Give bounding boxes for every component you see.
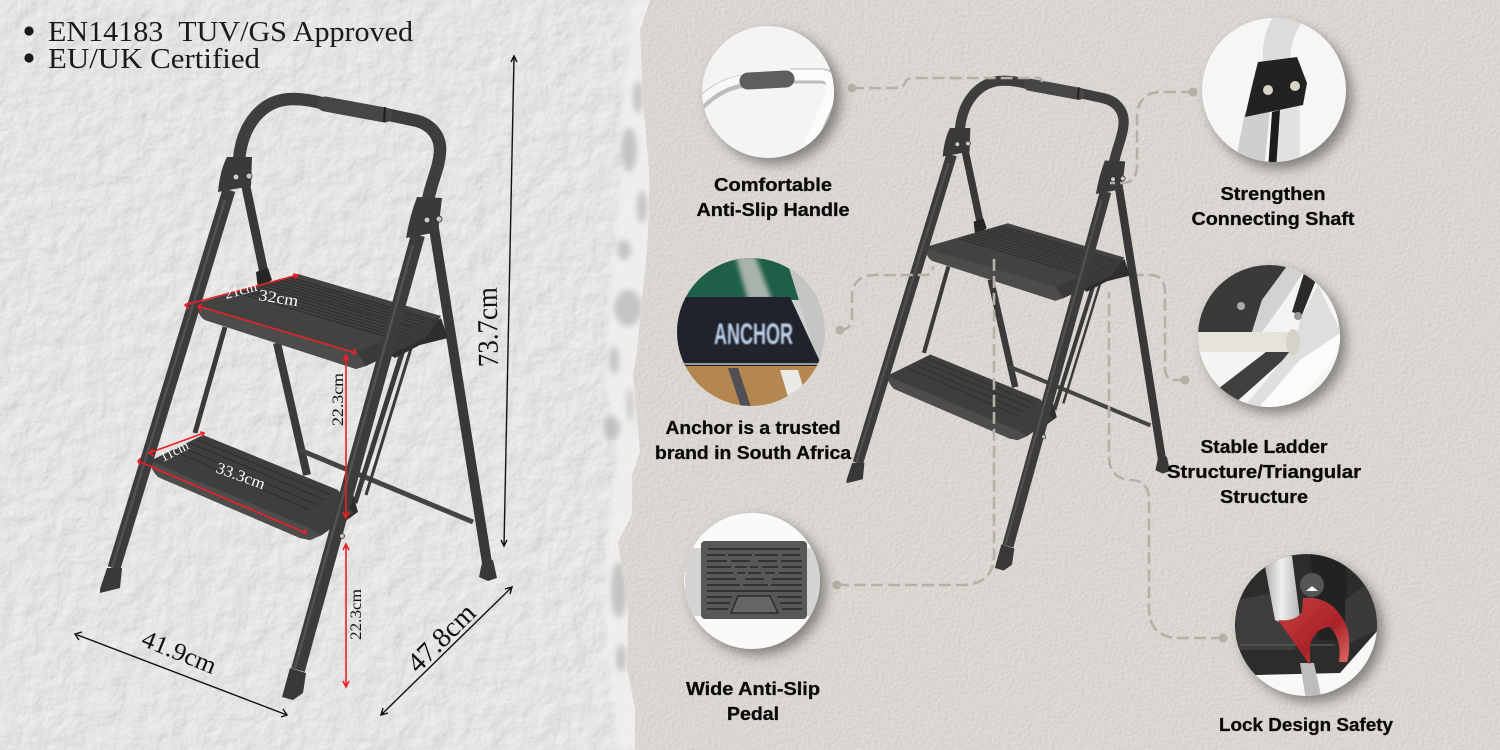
caption: shaft xyxy=(1192,184,1354,229)
caption: brand: brand in South Africa xyxy=(655,443,852,463)
caption: pedal: Wide Anti-Slip xyxy=(686,679,820,699)
caption: handle: Comfortable xyxy=(714,175,832,195)
photo circle: stable structure xyxy=(1195,262,1346,413)
photo circle: anchor brand label: ANCHOR xyxy=(714,318,793,351)
panel: left torn white paper xyxy=(0,0,660,750)
top step xyxy=(197,274,441,369)
title: certification bullet list: EU/UK Certified xyxy=(48,44,260,75)
label: height 73.7cm: 73.7cm xyxy=(472,286,505,367)
label: depth 47.8cm: 47.8cm xyxy=(401,597,482,679)
connector: shaft xyxy=(1110,88,1198,183)
label: rise 22.3cm lower: 22.3cm xyxy=(348,588,365,640)
caption: pedal: Pedal xyxy=(727,704,779,724)
caption: structure: Structure xyxy=(1220,487,1308,507)
connector: pedal xyxy=(832,257,994,590)
photo circle: anchor brand label xyxy=(677,258,825,406)
title: certification bullet list xyxy=(24,17,413,75)
connector: structure xyxy=(1137,275,1190,384)
label: lower step depth 11cm: 11cm xyxy=(158,439,192,466)
caption: brand: Anchor is a trusted xyxy=(666,418,840,438)
photo circle: wide anti-slip pedal xyxy=(684,513,826,655)
caption: shaft: Strengthen xyxy=(1220,184,1326,204)
label: width 41.9cm: 41.9cm xyxy=(138,626,221,680)
caption: handle: Anti-Slip Handle xyxy=(696,200,850,220)
photo circle: anti-slip handle xyxy=(700,26,841,164)
dimensions: red step arrows xyxy=(138,274,356,687)
caption: structure xyxy=(1167,437,1361,507)
label: step width 32cm: 32cm xyxy=(257,287,300,310)
caption: structure: Stable Ladder xyxy=(1200,437,1328,457)
dimensions: overall black arrows xyxy=(75,56,517,717)
connector: handle xyxy=(848,78,1042,92)
title: certification bullet list: EN14183 TUV/GS Approved xyxy=(48,17,413,48)
label: rise 22.3cm upper: 22.3cm xyxy=(330,372,347,426)
illustration: step ladder with callouts xyxy=(846,81,1170,570)
photo circle: lock design xyxy=(1235,550,1383,702)
photo circle: connecting shaft xyxy=(1202,12,1352,170)
label: lower step width 33.3cm: 33.3cm xyxy=(214,460,268,493)
caption: brand xyxy=(655,418,852,463)
connector: lock xyxy=(1109,292,1228,642)
caption: structure: Structure/Triangular xyxy=(1167,462,1361,482)
bottom step xyxy=(150,435,353,540)
caption: lock: Lock Design Safety xyxy=(1219,715,1393,735)
caption: pedal xyxy=(686,679,820,724)
caption: handle xyxy=(696,175,850,220)
illustration: folding step ladder with dimensions base xyxy=(100,99,497,700)
label: step depth 21cm: 21cm xyxy=(223,280,259,303)
connector: brand xyxy=(836,266,933,334)
caption: shaft: Connecting Shaft xyxy=(1192,209,1354,229)
